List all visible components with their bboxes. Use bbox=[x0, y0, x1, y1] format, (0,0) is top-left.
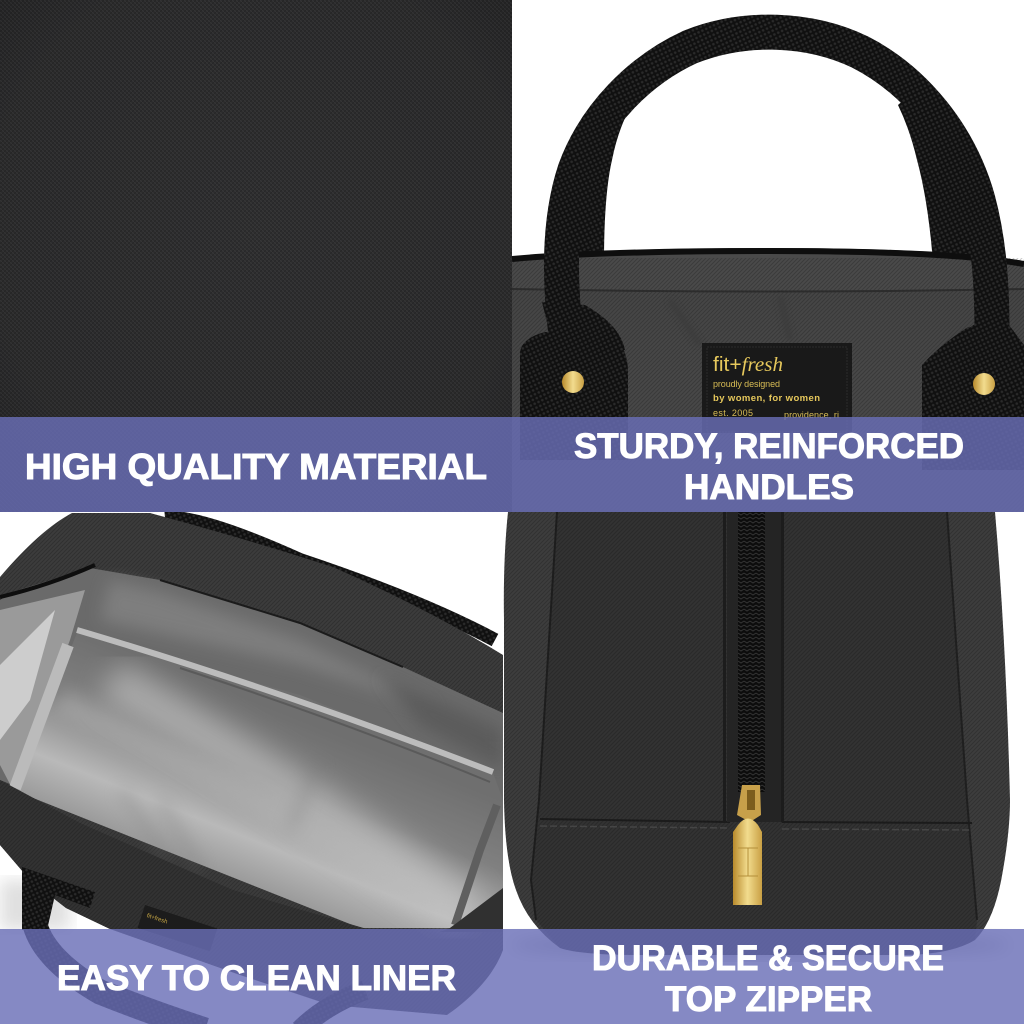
brand label: fit+fresh bbox=[713, 354, 783, 376]
pocket seam bbox=[540, 819, 972, 823]
liner seams bbox=[77, 630, 493, 772]
panel: open bag liner bbox=[0, 512, 503, 1024]
handle tabs bbox=[520, 332, 628, 460]
zipper edges bbox=[0, 565, 95, 597]
small label: fit+fresh bbox=[146, 913, 168, 926]
banner: high quality material bbox=[0, 417, 512, 512]
near rim fabric bbox=[0, 780, 367, 929]
brand label: proudly designed bbox=[713, 379, 780, 389]
panel: bag top with handles bbox=[512, 32, 1024, 512]
rear rim handle bbox=[165, 518, 495, 640]
zipper teeth bbox=[738, 512, 765, 792]
brand label bbox=[702, 343, 852, 433]
brand label: by women, for women bbox=[713, 393, 820, 404]
outer bag fabric bbox=[0, 513, 503, 1015]
banner: easy to clean liner: EASY TO CLEAN LINER bbox=[57, 959, 456, 998]
liner back wall bbox=[0, 568, 503, 800]
handle knots bbox=[542, 302, 1024, 350]
zipper seam bbox=[512, 251, 1024, 264]
ground shadow bbox=[510, 931, 1010, 959]
side panels bbox=[504, 512, 1010, 948]
fold shadows bbox=[678, 315, 697, 342]
banner: sturdy handles: STURDY, REINFORCED bbox=[574, 427, 964, 466]
panel: bag front with zipper bbox=[504, 512, 1010, 959]
floor wrinkles bbox=[126, 800, 301, 864]
rivets bbox=[562, 371, 584, 393]
zipper tape bbox=[727, 512, 781, 822]
brand label: est. 2005 bbox=[713, 408, 753, 418]
side panel seams bbox=[531, 512, 557, 920]
left liner wall bbox=[0, 590, 85, 790]
bag silhouette bbox=[504, 512, 1010, 955]
front handle bbox=[561, 32, 992, 335]
front handle tie bbox=[22, 867, 95, 930]
banner: easy to clean liner bbox=[0, 929, 512, 1024]
banner: durable top zipper bbox=[512, 929, 1024, 1024]
panel: fabric close-up bbox=[0, 0, 512, 512]
small label bbox=[138, 905, 218, 929]
bag upper body bbox=[512, 248, 1024, 292]
banner: sturdy handles bbox=[512, 417, 1024, 512]
banner: durable top zipper: TOP ZIPPER bbox=[665, 980, 872, 1019]
liner floor bbox=[13, 633, 503, 928]
brand label: providence, ri bbox=[784, 410, 839, 420]
zipper slider and pull bbox=[733, 785, 762, 905]
banner: high quality material: HIGH QUALITY MATERIAL bbox=[25, 446, 487, 487]
banner: sturdy handles: HANDLES bbox=[684, 468, 854, 507]
banner: durable top zipper: DURABLE & SECURE bbox=[592, 939, 944, 978]
handle arc under banner bbox=[35, 925, 205, 1024]
rear handle bbox=[579, 102, 970, 254]
floor shadow bbox=[0, 880, 70, 930]
